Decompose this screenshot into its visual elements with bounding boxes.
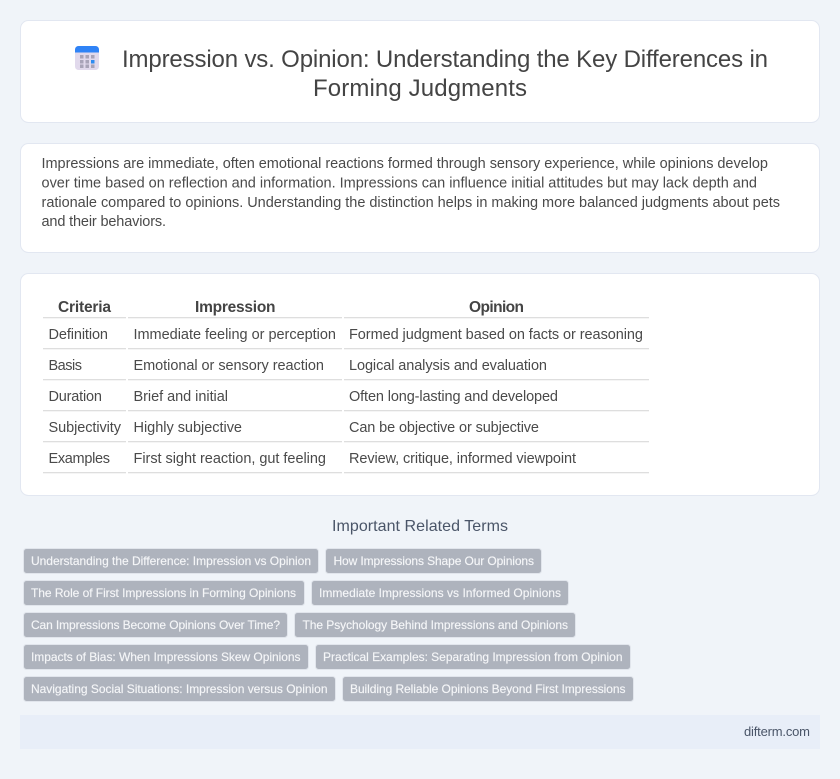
text block: introduction paragraph: rationale compared to opinions. Understanding the distinction helps in making more balanced judgments about pets: [42, 195, 780, 211]
tag: [24, 676, 336, 702]
tag: Impacts of Bias: When Impressions Skew Opinions: [31, 650, 300, 664]
text block: introduction paragraph: over time based on reflection and information. Impressions can influence initial attitudes but may lack depth and: [42, 176, 757, 192]
table row: duration: [48, 389, 558, 405]
table row: duration: Duration: [48, 389, 102, 405]
tag: [316, 644, 630, 670]
tag: [24, 548, 318, 574]
table header: Impression: [195, 299, 276, 316]
title: [122, 46, 768, 102]
footer: [20, 715, 820, 749]
table header: [58, 299, 524, 316]
table row: duration: Often long-lasting and developed: [349, 389, 558, 405]
table row: subjectivity: [48, 420, 539, 436]
tag: [24, 612, 288, 638]
tag: How Impressions Shape Our Opinions: [334, 554, 534, 568]
table header: Criteria: [58, 299, 111, 316]
tag: [326, 548, 542, 574]
icon: calendar: [75, 46, 99, 70]
tag: [24, 580, 304, 606]
table row: examples: [48, 451, 576, 467]
tag: Can Impressions Become Opinions Over Time?: [31, 618, 280, 632]
tag: Navigating Social Situations: Impression versus Opinion: [31, 682, 328, 696]
tag: [24, 644, 308, 670]
tag: [312, 580, 568, 606]
tag: Practical Examples: Separating Impression from Opinion: [323, 650, 622, 664]
panel: introduction: [20, 144, 820, 252]
table row: examples: Review, critique, informed viewpoint: [349, 451, 576, 467]
table row: subjectivity: Highly subjective: [134, 420, 242, 436]
table row: definition: Formed judgment based on facts or reasoning: [349, 327, 643, 343]
table header: Opinion: [469, 299, 524, 316]
tag: Immediate Impressions vs Informed Opinions: [319, 586, 561, 600]
table row: examples: First sight reaction, gut feeling: [134, 451, 326, 467]
footer source text: difterm.com: [744, 724, 810, 739]
panel: comparison table: [20, 274, 820, 496]
tag: Building Reliable Opinions Beyond First Impressions: [350, 682, 626, 696]
title: Forming Judgments: [313, 75, 527, 102]
table row: duration: Brief and initial: [134, 389, 228, 405]
table row: subjectivity: Can be objective or subjective: [349, 420, 539, 436]
table row: examples: Examples: [48, 451, 110, 467]
title: Impression vs. Opinion: Understanding the Key Differences in: [122, 46, 768, 73]
heading: important related terms: Important Related Terms: [332, 518, 508, 535]
table row: basis: Logical analysis and evaluation: [349, 358, 547, 374]
table row: basis: Basis: [48, 358, 82, 374]
panel: header card: [20, 20, 820, 122]
text block: introduction paragraph: [42, 156, 780, 230]
table row: subjectivity: Subjectivity: [48, 420, 122, 436]
table row: definition: Immediate feeling or perception: [134, 327, 336, 343]
tag: [342, 676, 634, 702]
tag: Understanding the Difference: Impression vs Opinion: [31, 554, 311, 568]
text block: introduction paragraph: and their behaviors.: [42, 214, 166, 230]
table row: definition: Definition: [48, 327, 108, 343]
tag: The Psychology Behind Impressions and Opinions: [302, 618, 568, 632]
tag group: related terms: [24, 548, 634, 702]
text block: introduction paragraph: Impressions are immediate, often emotional reactions formed through sensory experience, while opinions develop: [42, 156, 768, 172]
table row: definition: [48, 327, 643, 343]
tag: The Role of First Impressions in Forming Opinions: [31, 586, 296, 600]
tag: [294, 612, 576, 638]
table row: basis: Emotional or sensory reaction: [134, 358, 324, 374]
table row: basis: [48, 358, 547, 374]
